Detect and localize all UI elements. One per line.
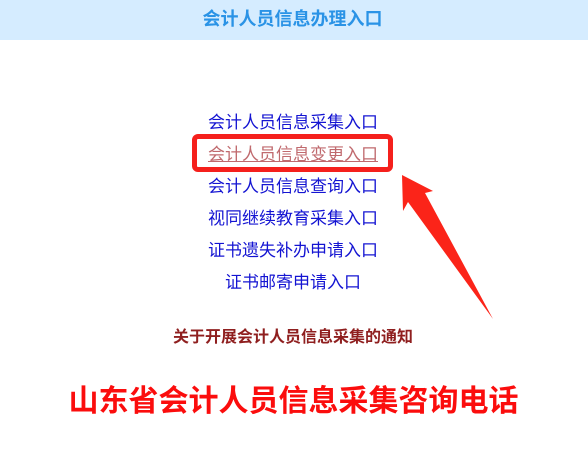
heading: 会计人员信息办理入口 bbox=[202, 9, 382, 29]
link: information change (visited): 会计人员信息变更入口 bbox=[208, 145, 378, 164]
highlight box around change link bbox=[192, 134, 393, 172]
notice text: 关于开展会计人员信息采集的通知 bbox=[173, 329, 413, 346]
header bar bbox=[0, 0, 588, 40]
consultation phone heading: 山东省会计人员信息采集咨询电话 bbox=[68, 385, 518, 418]
link: certificate mailing: 证书邮寄申请入口 bbox=[225, 273, 361, 292]
link: information collection: 会计人员信息采集入口 bbox=[208, 113, 378, 132]
link: lost certificate reissue: 证书遗失补办申请入口 bbox=[208, 241, 378, 260]
link: continuing education collection: 视同继续教育采集入口 bbox=[208, 209, 378, 228]
link: information query: 会计人员信息查询入口 bbox=[208, 177, 378, 196]
